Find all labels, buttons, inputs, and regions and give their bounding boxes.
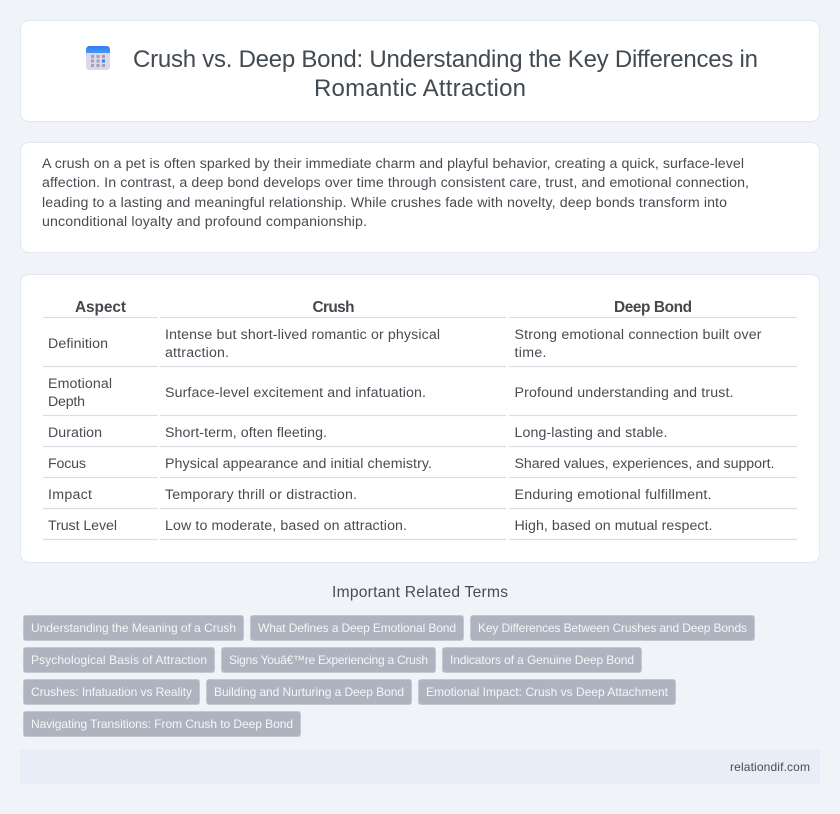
row: definition — [48, 327, 762, 361]
related term chips: What Defines a Deep Emotional Bond — [258, 621, 456, 635]
table header: Aspect — [75, 299, 126, 316]
row: impact: Temporary thrill or distraction. — [165, 487, 357, 503]
row: emotional depth: Surface-level excitement and infatuation. — [165, 385, 426, 401]
row: definition: Intense but short-lived romantic or physical — [165, 327, 440, 343]
row: impact: Impact — [48, 487, 92, 503]
row: duration: Duration — [48, 425, 102, 441]
row: duration: Long-lasting and stable. — [514, 425, 668, 441]
icon: calendar — [86, 46, 110, 70]
related term chips: Understanding the Meaning of a Crush — [31, 621, 236, 635]
row: focus: Focus — [48, 456, 86, 472]
related term chips: Navigating Transitions: From Crush to Deep Bond — [31, 717, 293, 731]
related term chips: Psychological Basis of Attraction — [31, 653, 207, 667]
footer: relationdif.com — [730, 760, 810, 774]
title — [133, 46, 758, 102]
row: trust level: Low to moderate, based on attraction. — [165, 518, 407, 534]
row: duration — [48, 425, 668, 441]
related term chips: Emotional Impact: Crush vs Deep Attachment — [426, 685, 669, 699]
related term chips: Building and Nurturing a Deep Bond — [214, 685, 404, 699]
title: Crush vs. Deep Bond: Understanding the Key Differences in — [133, 46, 758, 73]
row: definition: Strong emotional connection built over — [514, 327, 762, 343]
row: definition: attraction. — [165, 345, 229, 361]
table header: Deep Bond — [614, 299, 692, 316]
row: definition: Definition — [48, 336, 108, 352]
panel: intro text: affection. In contrast, a deep bond develops over time through consistent care, trust, and emotional connection, — [42, 175, 749, 191]
row: focus: Shared values, experiences, and support. — [514, 456, 774, 472]
row: duration: Short-term, often fleeting. — [165, 425, 327, 441]
related term chips: Indicators of a Genuine Deep Bond — [450, 653, 634, 667]
related term chips — [24, 616, 754, 736]
table header — [75, 299, 692, 316]
panel: intro text: A crush on a pet is often sparked by their immediate charm and playful behavior, creating a quick, surface-level — [42, 156, 744, 172]
row: impact: Enduring emotional fulfillment. — [514, 487, 712, 503]
row: emotional depth: Profound understanding and trust. — [514, 385, 734, 401]
row: emotional depth — [48, 376, 734, 410]
panel: intro text — [20, 142, 820, 252]
panel: intro text: unconditional loyalty and profound companionship. — [42, 214, 367, 230]
row: emotional depth: Emotional — [48, 376, 112, 392]
panel: comparison table — [20, 274, 820, 562]
row: focus: Physical appearance and initial chemistry. — [165, 456, 432, 472]
panel: intro text: leading to a lasting and meaningful relationship. While crushes fade with novelty, deep bonds transform into — [42, 195, 727, 211]
row: emotional depth: Depth — [48, 394, 85, 410]
heading: related terms: Important Related Terms — [332, 584, 508, 601]
row: impact — [48, 487, 712, 503]
row: definition: time. — [514, 345, 546, 361]
row: trust level — [48, 518, 712, 534]
related term chips: Key Differences Between Crushes and Deep Bonds — [478, 621, 747, 635]
row: trust level: Trust Level — [48, 518, 117, 534]
row: trust level: High, based on mutual respect. — [514, 518, 712, 534]
row: focus — [48, 456, 774, 472]
header panel — [20, 20, 820, 122]
title: Romantic Attraction — [314, 75, 526, 102]
table header: Crush — [312, 299, 354, 316]
related term chips: Signs Youâ€™re Experiencing a Crush — [229, 653, 428, 667]
related term chips: Crushes: Infatuation vs Reality — [31, 685, 192, 699]
footer — [20, 750, 820, 784]
